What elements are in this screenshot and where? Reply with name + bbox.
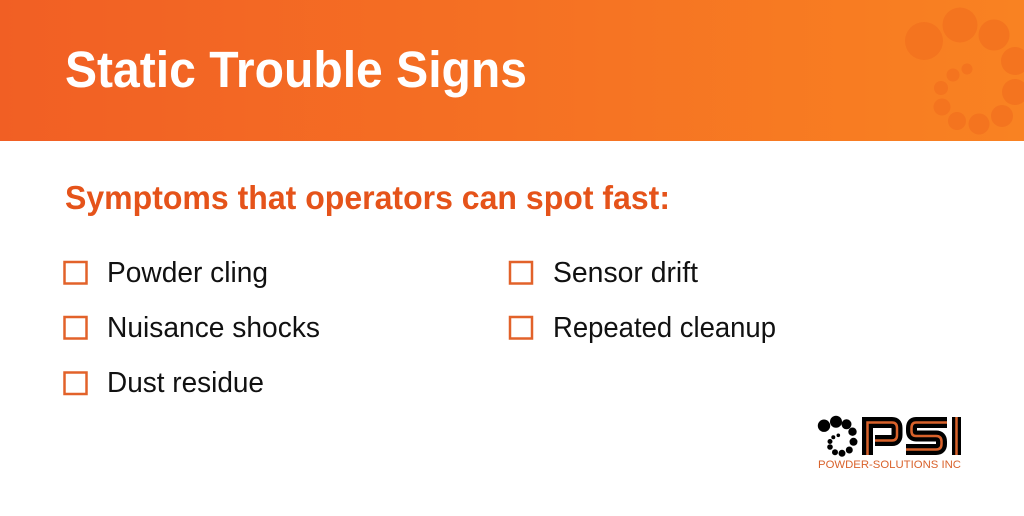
logo letters PSI [868,417,956,455]
logo: PSI Powder-Solutions Inc [818,416,961,471]
item: powder cling: Powder cling [107,257,268,289]
letter S [906,422,947,450]
title: Static Trouble Signs [65,41,527,98]
item: sensor drift: Sensor drift [553,257,698,289]
item: repeated cleanup: Repeated cleanup [553,312,776,344]
letter I [952,417,961,455]
item: nuisance shocks: Nuisance shocks [107,312,320,344]
header banner [0,0,1024,141]
checklist: right column [510,257,776,344]
icon: logo particle ring [818,416,858,457]
item: dust residue: Dust residue [107,367,264,399]
logo tagline: POWDER-SOLUTIONS INC [818,459,961,471]
letter P [868,422,897,455]
checklist: left column [64,257,320,399]
icon: decorative particle ring [905,8,1024,134]
heading: symptoms: Symptoms that operators can spot fast: [65,179,670,216]
